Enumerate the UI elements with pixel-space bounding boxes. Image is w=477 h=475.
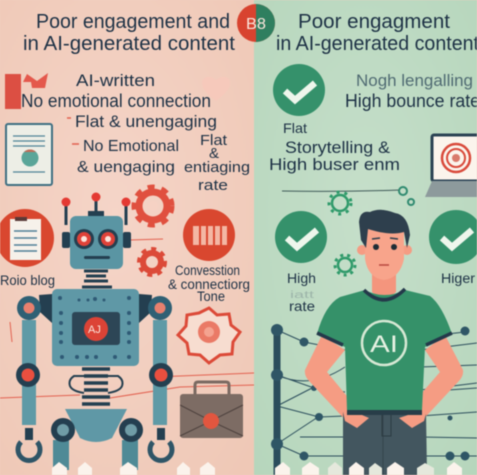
right heading: Poor engagment bbox=[298, 11, 450, 33]
left text block: flat and engaging rate bbox=[184, 132, 250, 194]
icon: green check top bbox=[273, 64, 325, 116]
icon: soft heart bbox=[202, 77, 230, 101]
left heading: in AI-generated content bbox=[23, 33, 235, 55]
robot antennas bbox=[62, 192, 130, 225]
left caption: conversation and connection tone: & connectiorg bbox=[168, 277, 250, 292]
icon: briefcase bbox=[180, 382, 243, 438]
person t-shirt bbox=[317, 289, 452, 415]
badge: centre B8: B8 bbox=[246, 16, 266, 33]
icon: red bookmark and envelope bbox=[5, 73, 48, 109]
left heading bbox=[23, 11, 235, 55]
robot head bbox=[62, 216, 131, 269]
divider with green node bbox=[282, 190, 400, 191]
icon: red star gear bbox=[178, 308, 240, 363]
fence pickets bbox=[52, 462, 462, 475]
icon: green check right bbox=[429, 210, 477, 264]
icon: tablet document bbox=[6, 124, 52, 185]
robot waist bbox=[70, 369, 122, 404]
right caption: high rate bbox=[287, 270, 316, 314]
right text block: storytelling bbox=[269, 120, 400, 174]
right caption: high rate: rate bbox=[289, 298, 315, 314]
left text block: flat and engaging rate: entiaging bbox=[184, 159, 250, 176]
left text block: flat and engaging rate: & bbox=[209, 145, 219, 162]
right caption: high rate: iatt bbox=[290, 290, 314, 301]
robot hips and legs bbox=[51, 409, 143, 470]
right text block: high bounce rate: Nogh lengalling bbox=[356, 72, 473, 90]
robot neck bbox=[82, 271, 112, 287]
person trousers bbox=[343, 412, 427, 475]
robot arms bbox=[16, 294, 173, 461]
fence wires bbox=[271, 324, 477, 475]
person neck and head bbox=[357, 210, 412, 298]
icon: red gear middle bbox=[139, 249, 165, 275]
left text block: AI-written list bbox=[21, 72, 217, 176]
red dashes bbox=[67, 118, 79, 144]
person arms bbox=[305, 335, 463, 425]
right heading bbox=[276, 11, 477, 55]
icon: green gear top bbox=[329, 187, 414, 214]
right caption: high rate: High bbox=[287, 270, 316, 286]
icon: red circle with document bbox=[0, 209, 54, 267]
left text block: AI-written list: AI-written bbox=[76, 72, 155, 90]
left caption: conversation and connection tone: Tone bbox=[197, 289, 225, 304]
icon: laptop with target bbox=[425, 135, 477, 197]
right text block: high bounce rate bbox=[345, 72, 477, 111]
left text block: AI-written list: No Emotional bbox=[83, 138, 179, 155]
panel: right background bbox=[254, 0, 477, 475]
panel: left background bbox=[0, 0, 255, 475]
right heading: in AI-generated content bbox=[276, 33, 477, 55]
icon: red circle with columns bbox=[183, 209, 235, 261]
robot illustration bbox=[16, 192, 173, 470]
person hands bbox=[342, 407, 428, 428]
left caption: blog: Roio blog bbox=[0, 273, 55, 288]
badge: centre B8 bbox=[237, 4, 275, 42]
robot torso: AJ bbox=[88, 324, 101, 336]
left heading: Poor engagement and bbox=[36, 11, 230, 33]
left caption: conversation and connection tone bbox=[168, 263, 250, 304]
robot torso bbox=[52, 289, 139, 366]
icon: green check left bbox=[275, 211, 327, 263]
icon: green gear lower bbox=[335, 255, 355, 275]
red wires bbox=[0, 239, 254, 398]
right text block: storytelling: Flat bbox=[283, 120, 307, 136]
left text block: flat and engaging rate: rate bbox=[198, 177, 228, 194]
icon: red gear top bbox=[134, 187, 172, 225]
left text block: AI-written list: & uengaging bbox=[77, 159, 175, 176]
left caption: conversation and connection tone: Convesstion bbox=[175, 263, 240, 278]
right text block: storytelling: High buser enm bbox=[269, 156, 400, 174]
left text block: AI-written list: Flat & unengaging bbox=[75, 113, 217, 131]
right text block: storytelling: Storytelling & bbox=[285, 139, 390, 157]
right caption: higer: Higer bbox=[441, 270, 475, 286]
left text block: AI-written list: No emotional connection bbox=[21, 91, 211, 111]
person illustration bbox=[305, 210, 463, 475]
person t-shirt: AI bbox=[370, 331, 398, 358]
left text block: flat and engaging rate: Flat bbox=[200, 132, 228, 149]
